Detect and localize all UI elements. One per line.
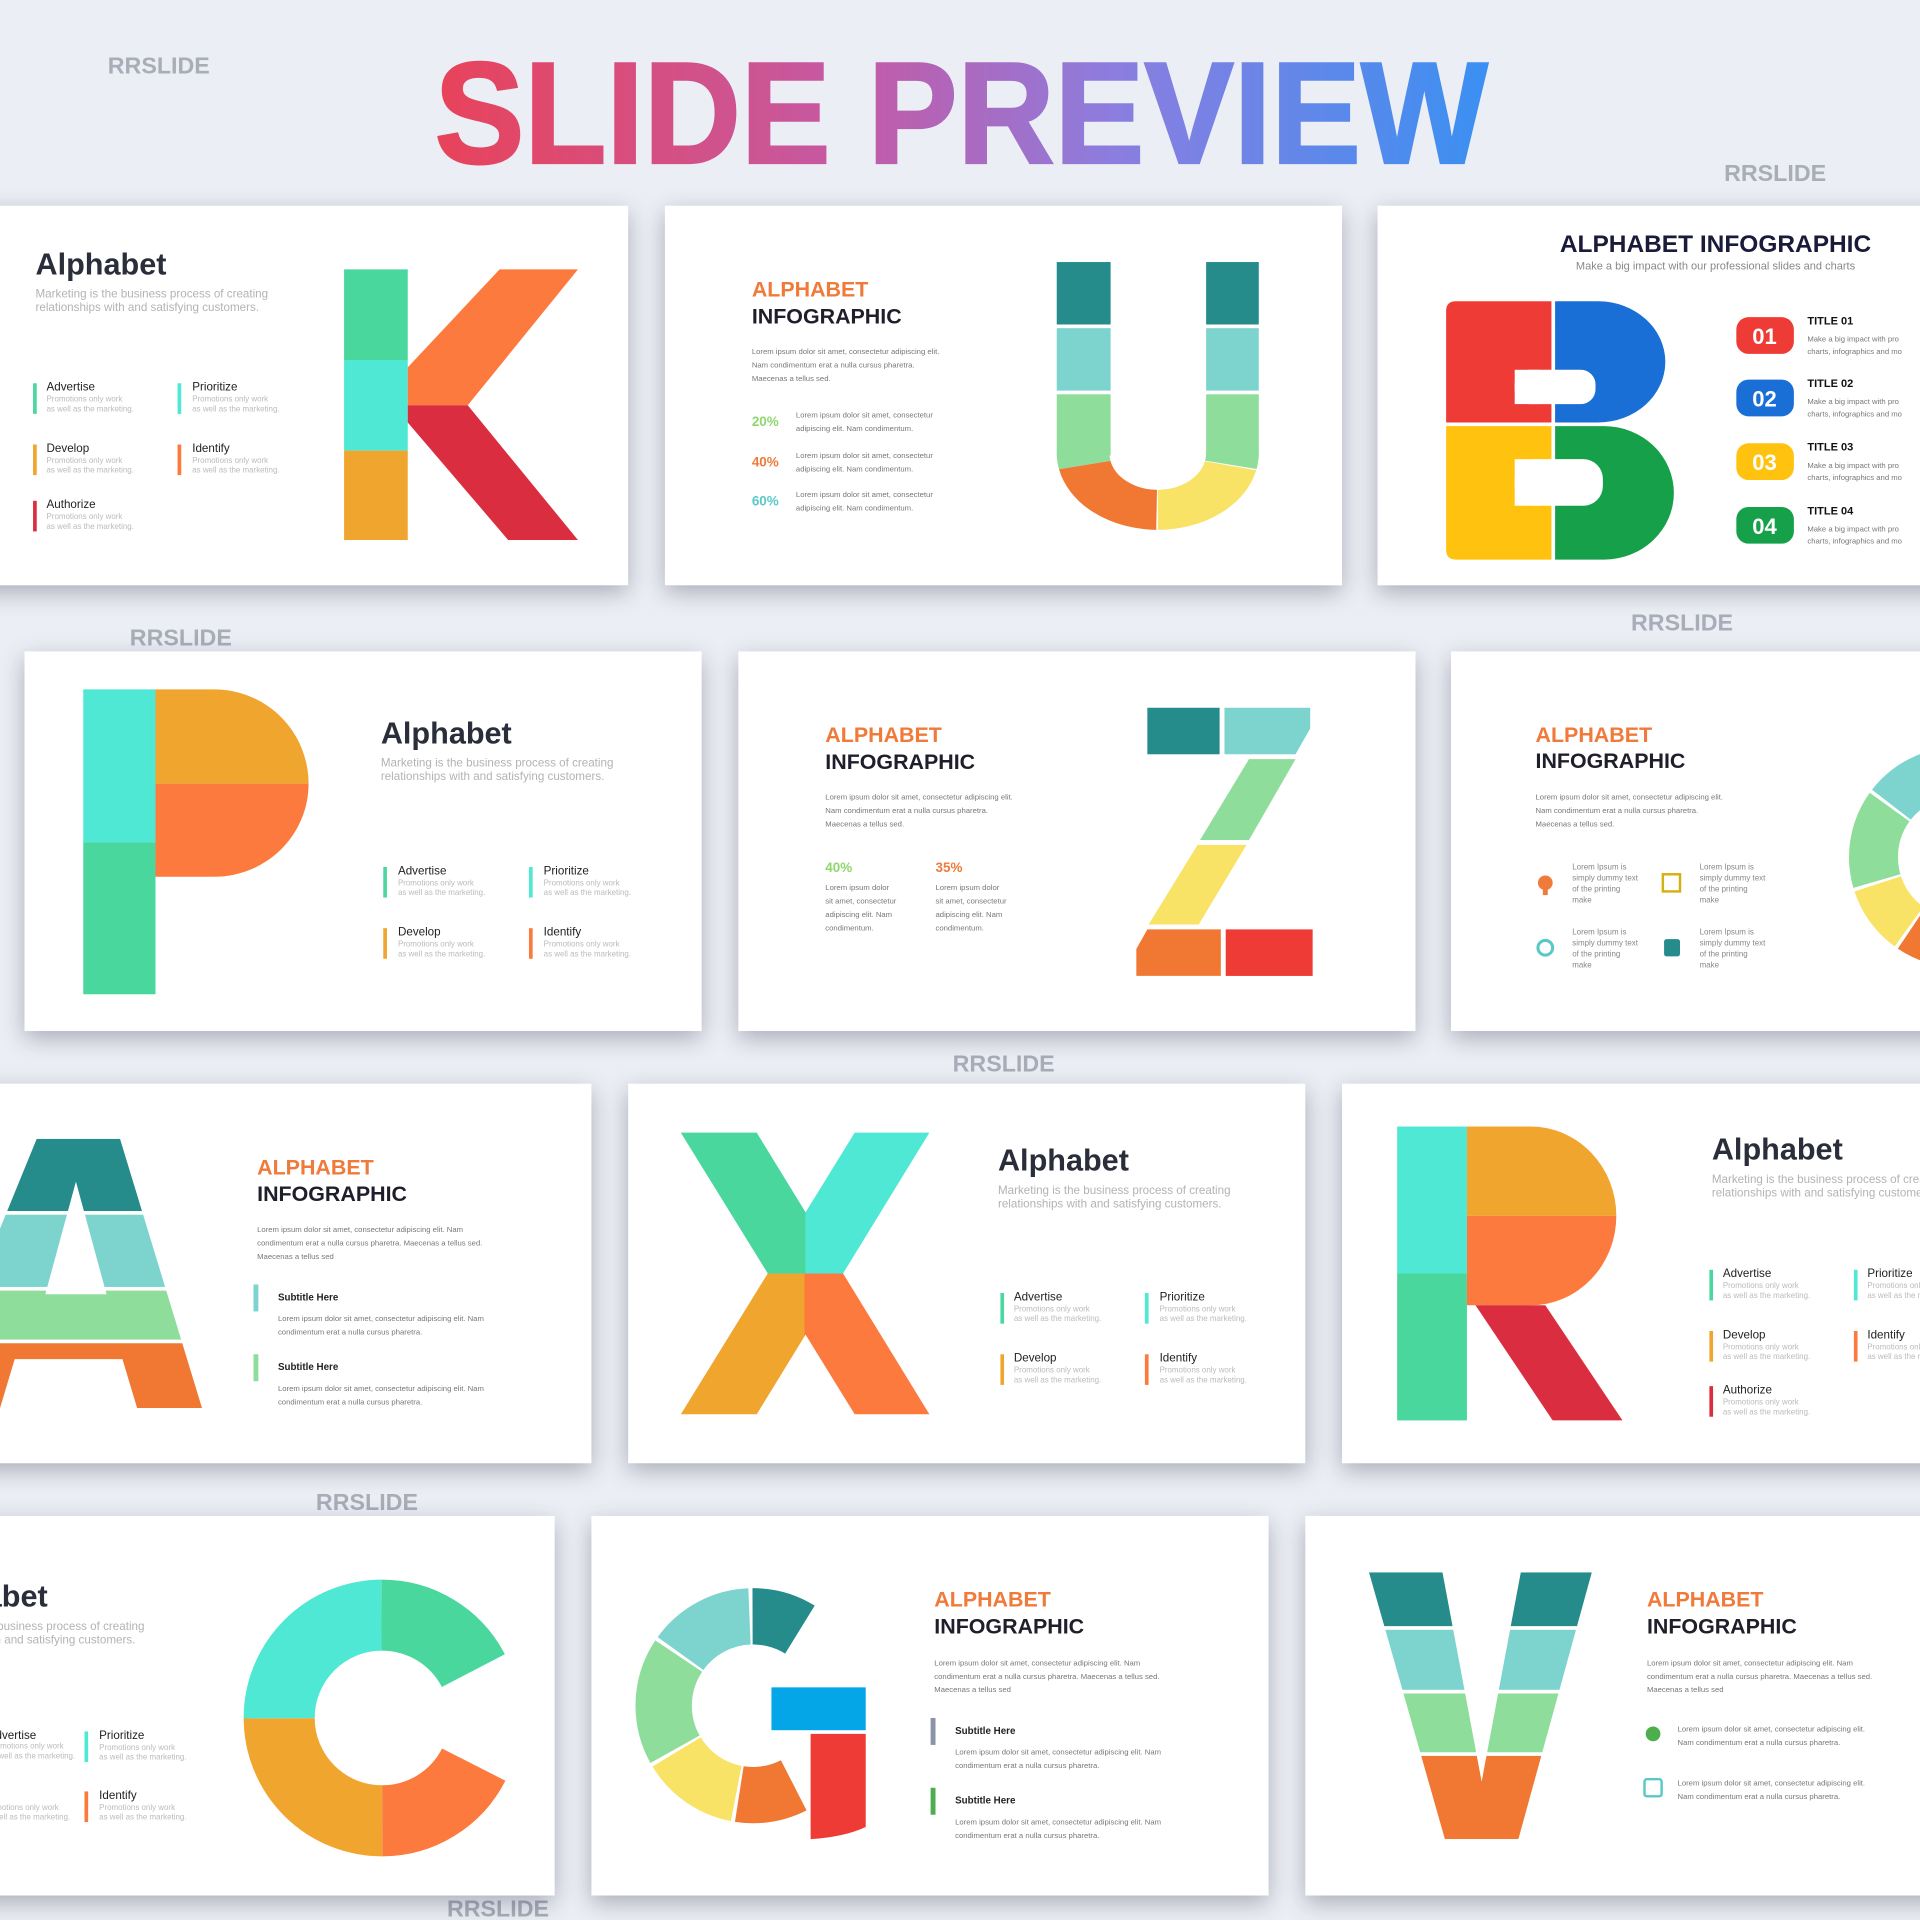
heading: condimentum erat a nulla cursus pharetra. Maecenas a tellus sed. [257, 1238, 482, 1247]
stats: adipiscing elit. Nam condimentum. [796, 464, 913, 473]
heading [257, 1155, 482, 1261]
subtitle items: Subtitle Here [278, 1292, 339, 1303]
list: Advertise [1723, 1267, 1771, 1280]
list: Identify [99, 1789, 137, 1802]
icon items: of the printing [1700, 884, 1748, 893]
stats: sit amet, consectetur [936, 897, 1007, 906]
heading: Nam condimentum erat a nulla cursus pharetra. [1536, 806, 1698, 815]
list: as well as the marketing. [1014, 1375, 1101, 1384]
icon items [1644, 1724, 1865, 1801]
icon items: make [1572, 960, 1592, 969]
heading: ALPHABET INFOGRAPHIC [1560, 231, 1871, 258]
numbered list: Make a big impact with pro [1807, 397, 1899, 406]
heading: Alphabet [381, 716, 512, 750]
watermarks: RRSLIDE [953, 1050, 1055, 1076]
list: Prioritize [1867, 1267, 1913, 1280]
list: Develop [1723, 1328, 1766, 1341]
heading: Alphabet [1712, 1133, 1843, 1167]
list: as well as the marketing. [47, 522, 134, 531]
heading: INFOGRAPHIC [257, 1182, 407, 1206]
letter Z [1136, 708, 1313, 976]
subtitle items: Lorem ipsum dolor sit amet, consectetur adipiscing elit. Nam [278, 1314, 484, 1323]
subtitle items: condimentum erat a nulla cursus pharetra. [955, 1831, 1099, 1840]
letter C [279, 1615, 485, 1821]
heading: ALPHABET [825, 723, 942, 747]
list: Promotions only work [99, 1743, 175, 1752]
list: as well as the marketing. [192, 404, 280, 413]
numbered list: Make a big impact with pro [1807, 461, 1899, 470]
list [383, 864, 631, 959]
stats: 40% [825, 860, 852, 875]
heading [934, 1588, 1160, 1694]
icon items: Lorem Ipsum is [1700, 862, 1754, 871]
heading: Nam condimentum erat a nulla cursus pharetra. [752, 360, 915, 369]
heading: ALPHABET [1647, 1588, 1763, 1612]
letter X [681, 1133, 929, 1414]
panel: B slide [1378, 206, 1920, 585]
list: as well as the marketing. [99, 1753, 187, 1762]
panel: C slide [0, 1516, 555, 1896]
list: as well as the marketing. [192, 466, 280, 475]
list: Prioritize [1160, 1290, 1205, 1303]
stats: adipiscing elit. Nam condimentum. [796, 504, 913, 513]
heading: INFOGRAPHIC [934, 1614, 1084, 1638]
letter U [1057, 262, 1259, 510]
list: Promotions only work [1160, 1304, 1235, 1313]
heading: INFOGRAPHIC [752, 304, 902, 328]
heading: Alphabet: Alphabet [36, 247, 166, 281]
heading: Nam condimentum erat a nulla cursus pharetra. [825, 806, 988, 815]
numbered list: Make a big impact with pro [1807, 335, 1899, 344]
numbered list: charts, infographics and mo [1807, 473, 1902, 482]
heading: Lorem ipsum dolor sit amet, consectetur adipiscing elit. [825, 793, 1013, 802]
list [33, 381, 280, 531]
icon items: Lorem ipsum dolor sit amet, consectetur adipiscing elit. [1678, 1778, 1865, 1787]
title: SLIDE PREVIEW [435, 32, 1488, 194]
watermarks: RRSLIDE [1724, 160, 1826, 186]
watermarks: RRSLIDE [316, 1489, 418, 1515]
numbered list: TITLE 02 [1807, 378, 1853, 390]
panel: R slide [1342, 1084, 1920, 1463]
heading: relationships with and satisfying customers. [381, 770, 604, 783]
list: as well as the marketing. [1160, 1375, 1247, 1384]
icon items: simply dummy text [1572, 938, 1639, 947]
heading: Alphabet: Marketing is the business process of creating [36, 288, 268, 301]
list: Promotions only work [192, 395, 268, 404]
list: Identify [192, 442, 230, 455]
list: Promotions only work [1723, 1397, 1799, 1406]
icon items [1538, 862, 1766, 969]
letter R [1397, 1127, 1622, 1420]
icon items: Lorem Ipsum is [1572, 927, 1627, 936]
stats: Lorem ipsum dolor [825, 883, 890, 892]
heading [825, 723, 1013, 829]
numbered list: TITLE 03 [1807, 442, 1853, 454]
stats: 60% [752, 494, 779, 509]
heading: Maecenas a tellus sed. [752, 374, 831, 383]
numbered list: charts, infographics and mo [1807, 347, 1902, 356]
heading: ALPHABET [257, 1155, 374, 1179]
heading: Maecenas a tellus sed. [825, 820, 904, 829]
heading [998, 1144, 1231, 1210]
stats: adipiscing elit. Nam [825, 910, 892, 919]
stats [825, 860, 1007, 933]
numbered list: TITLE 04 [1807, 505, 1854, 517]
icon items: make [1700, 895, 1720, 904]
list: Promotions only work [47, 456, 122, 465]
list: as well as the marketing. [544, 888, 631, 897]
heading: Marketing is the business process of creating [381, 757, 613, 770]
list: Identify [1160, 1352, 1197, 1365]
list: Promotions only work [398, 878, 474, 887]
numbered list: 01 [1752, 324, 1777, 349]
heading: Alphabet [36, 247, 268, 314]
heading [0, 1580, 144, 1646]
subtitle items [253, 1284, 484, 1406]
icon items: simply dummy text [1700, 938, 1766, 947]
ring chart [1873, 771, 1920, 943]
list: Advertise [398, 864, 446, 877]
subtitle items: Lorem ipsum dolor sit amet, consectetur adipiscing elit. Nam [955, 1817, 1161, 1826]
subtitle items [931, 1718, 1161, 1840]
heading: Make a big impact with our professional slides and charts [1576, 260, 1856, 272]
panel: X slide [628, 1084, 1305, 1463]
heading: INFOGRAPHIC [1647, 1614, 1797, 1638]
subtitle items: Subtitle Here [955, 1796, 1016, 1807]
list: Promotions only work [1014, 1304, 1090, 1313]
list: Promotions only work [47, 512, 122, 521]
stats: 35% [936, 860, 962, 875]
icon items: Lorem Ipsum is [1700, 927, 1754, 936]
list: Promotions only work [99, 1803, 175, 1812]
list: Develop [1014, 1352, 1057, 1365]
panel: U slide [665, 206, 1342, 585]
subtitle items: condimentum erat a nulla cursus pharetra. [278, 1328, 422, 1337]
icon items: Lorem Ipsum is [1572, 862, 1627, 871]
list: Promotions only work [398, 940, 474, 949]
heading: Maecenas a tellus sed. [1536, 820, 1614, 829]
list: as well as the marketing. [47, 404, 134, 413]
icon items: of the printing [1572, 949, 1620, 958]
heading: Alphabet [998, 1144, 1129, 1178]
heading: Maecenas a tellus sed [1647, 1685, 1724, 1694]
list: Develop [398, 926, 441, 939]
heading [1712, 1133, 1920, 1199]
heading: Lorem ipsum dolor sit amet, consectetur adipiscing elit. Nam [934, 1658, 1140, 1667]
heading: Maecenas a tellus sed [257, 1252, 334, 1261]
list: as well as the marketing. [544, 949, 631, 958]
icon items: of the printing [1700, 949, 1748, 958]
list: Promotions only work [47, 395, 122, 404]
list: Promotions only work [192, 456, 268, 465]
heading: ALPHABET [934, 1588, 1051, 1612]
list: Authorize [1723, 1383, 1772, 1396]
stats: Lorem ipsum dolor sit amet, consectetur [796, 411, 933, 420]
subtitle items: Subtitle Here [955, 1726, 1016, 1737]
list: as well as the marketing. [1723, 1407, 1810, 1416]
panel: V slide [1305, 1516, 1920, 1896]
stats: adipiscing elit. Nam condimentum. [796, 424, 913, 433]
numbered list: charts, infographics and mo [1807, 537, 1902, 546]
list: as well as the marketing. [1014, 1314, 1101, 1323]
stats [752, 411, 933, 513]
heading: condimentum erat a nulla cursus pharetra. Maecenas a tellus sed. [1647, 1672, 1872, 1681]
subtitle items: Lorem ipsum dolor sit amet, consectetur adipiscing elit. Nam [278, 1384, 484, 1393]
numbered list: charts, infographics and mo [1807, 409, 1902, 418]
heading [381, 716, 613, 783]
heading: Lorem ipsum dolor sit amet, consectetur adipiscing elit. Nam [257, 1225, 463, 1234]
panel: K slide [0, 206, 628, 585]
letter P [83, 689, 309, 994]
list: Identify [1867, 1328, 1905, 1341]
heading: condimentum erat a nulla cursus pharetra. Maecenas a tellus sed. [934, 1672, 1160, 1681]
icon items: of the printing [1572, 884, 1620, 893]
letter G [664, 1616, 866, 1839]
list: as well as the marketing. [1160, 1314, 1247, 1323]
numbered list: 02 [1752, 387, 1777, 412]
list: Develop [47, 442, 89, 455]
heading [1647, 1588, 1872, 1694]
numbered list: TITLE 01 [1807, 315, 1853, 327]
stats: sit amet, consectetur [825, 897, 897, 906]
heading: ALPHABET [752, 277, 868, 301]
letter B [1446, 301, 1674, 560]
stats: Lorem ipsum dolor sit amet, consectetur [796, 490, 933, 499]
heading [1536, 723, 1723, 829]
icon items: make [1700, 960, 1720, 969]
list: Prioritize [544, 864, 589, 877]
heading: INFOGRAPHIC [1536, 749, 1685, 773]
stats: Lorem ipsum dolor sit amet, consectetur [796, 451, 933, 460]
list: Advertise [1014, 1290, 1062, 1303]
icon items: simply dummy text [1700, 873, 1766, 882]
letter A [0, 1139, 220, 1408]
numbered list: 04 [1752, 514, 1777, 539]
list: as well as the marketing. [1723, 1352, 1810, 1361]
stats: Lorem ipsum dolor [936, 883, 1000, 892]
list: Identify [544, 926, 581, 939]
heading: relationships with and satisfying customers. [998, 1197, 1222, 1210]
stats: condimentum. [936, 924, 984, 933]
heading [752, 277, 939, 383]
letter K [344, 269, 578, 540]
list: Prioritize [99, 1729, 144, 1742]
list [0, 1729, 187, 1822]
heading [1560, 231, 1871, 272]
list: as well as the marketing. [398, 888, 485, 897]
panel: Z slide [738, 651, 1416, 1031]
stats: adipiscing elit. Nam [936, 910, 1002, 919]
list: as well as the marketing. [99, 1813, 187, 1822]
list: Advertise [47, 381, 95, 394]
list: as well as the marketing. [398, 949, 485, 958]
list: Authorize [47, 498, 96, 511]
icon items: simply dummy text [1572, 873, 1639, 882]
heading: Maecenas a tellus sed [934, 1685, 1011, 1694]
heading: Alphabet: relationships with and satisfying customers. [36, 301, 259, 314]
letter V [1359, 1572, 1604, 1842]
heading: ALPHABET [1536, 723, 1652, 747]
list: Promotions only work [1723, 1281, 1799, 1290]
icon items: Lorem ipsum dolor sit amet, consectetur adipiscing elit. [1678, 1724, 1865, 1733]
list: Prioritize [192, 381, 237, 394]
numbered list: 03 [1752, 450, 1777, 475]
list: Promotions only work [544, 940, 620, 949]
numbered list: Make a big impact with pro [1807, 524, 1899, 533]
numbered list [1736, 315, 1902, 546]
panel: P slide [24, 651, 702, 1031]
icon items: Nam condimentum erat a nulla cursus pharetra. [1678, 1738, 1840, 1747]
stats: 40% [752, 455, 779, 470]
watermarks: RRSLIDE [130, 624, 232, 650]
panel: G slide [591, 1516, 1269, 1896]
watermarks: RRSLIDE [1631, 610, 1733, 636]
list: as well as the marketing. [47, 466, 134, 475]
heading: Lorem ipsum dolor sit amet, consectetur adipiscing elit. Nam [1647, 1658, 1853, 1667]
icon items: Nam condimentum erat a nulla cursus pharetra. [1678, 1792, 1840, 1801]
panel: A slide [0, 1084, 591, 1463]
heading: Lorem ipsum dolor sit amet, consectetur adipiscing elit. [752, 347, 939, 356]
list: Promotions only work [1723, 1342, 1799, 1351]
watermarks: RRSLIDE [108, 52, 210, 78]
subtitle items: Subtitle Here [278, 1362, 339, 1373]
list [1709, 1267, 1920, 1417]
subtitle items: Lorem ipsum dolor sit amet, consectetur adipiscing elit. Nam [955, 1748, 1161, 1757]
heading: Lorem ipsum dolor sit amet, consectetur adipiscing elit. [1536, 793, 1723, 802]
stats: condimentum. [825, 924, 874, 933]
list: Promotions only work [1014, 1366, 1090, 1375]
list: Promotions only work [544, 878, 620, 887]
list: as well as the marketing. [1723, 1291, 1810, 1300]
subtitle items: condimentum erat a nulla cursus pharetra. [278, 1397, 422, 1406]
list: Promotions only work [1160, 1366, 1235, 1375]
stats: 20% [752, 414, 779, 429]
panel: ring slide [1451, 651, 1920, 1031]
subtitle items: condimentum erat a nulla cursus pharetra. [955, 1761, 1099, 1770]
heading: Marketing is the business process of creating [998, 1184, 1231, 1197]
icon items: make [1572, 895, 1592, 904]
list [1000, 1290, 1247, 1385]
heading: INFOGRAPHIC [825, 750, 975, 774]
